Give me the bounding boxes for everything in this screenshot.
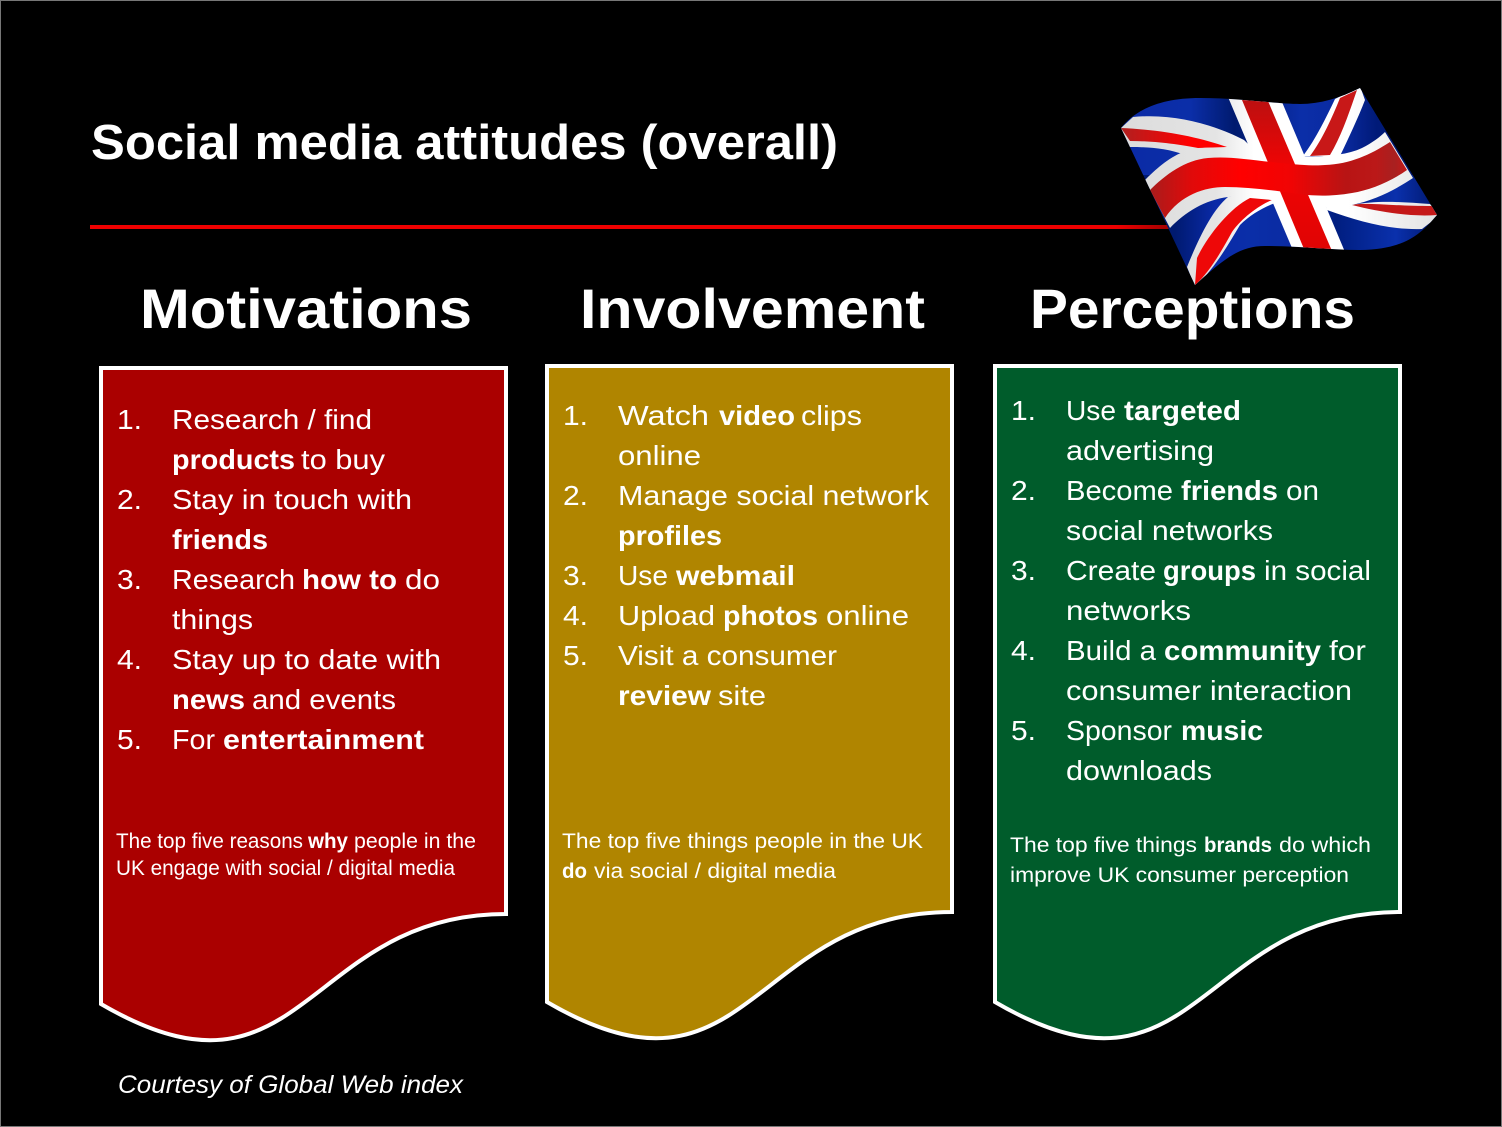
item 2: social networks	[1066, 515, 1273, 546]
item 4: photos	[723, 600, 818, 631]
list: perceptions	[1011, 395, 1371, 786]
caption: motivations: people in the	[354, 830, 476, 853]
item 3: in social	[1264, 555, 1371, 586]
item 5: entertainment	[223, 724, 424, 755]
item 5	[117, 724, 424, 755]
item 3: Research	[172, 564, 295, 595]
item 4	[563, 600, 909, 631]
item 5: downloads	[1066, 755, 1212, 786]
item 5: For	[172, 724, 215, 755]
item 3: 3.	[117, 564, 142, 595]
item 1	[563, 400, 862, 471]
list: involvement	[563, 400, 930, 711]
item 4: Build a	[1066, 635, 1156, 666]
item 2: 2.	[1011, 475, 1036, 506]
panel shape: gold	[547, 366, 952, 1038]
item 4: 4.	[563, 600, 588, 631]
item 2: on	[1286, 475, 1319, 506]
item 1	[1011, 395, 1241, 466]
panel shape: red	[101, 368, 506, 1040]
item 5: site	[718, 680, 766, 711]
item 4: community	[1164, 635, 1321, 666]
item 1: 1.	[563, 400, 588, 431]
caption: motivations: The top five reasons	[116, 830, 303, 853]
item 5	[1011, 715, 1263, 786]
item 5: 5.	[117, 724, 142, 755]
item 3: 3.	[1011, 555, 1036, 586]
item 3: webmail	[675, 560, 795, 591]
item 3: Use	[618, 560, 668, 591]
caption: perceptions: brands	[1204, 834, 1272, 857]
item 3: Create	[1066, 555, 1156, 586]
item 1: Watch	[618, 400, 709, 431]
item 1: products	[172, 444, 295, 475]
item 3	[1011, 555, 1371, 626]
item 2: Become	[1066, 475, 1173, 506]
item 4: Stay up to date with	[172, 644, 441, 675]
item 2	[117, 484, 412, 555]
caption: perceptions	[1010, 834, 1371, 887]
icon: waving UK flag	[1121, 88, 1437, 285]
item 4: news	[172, 684, 245, 715]
item 2: 2.	[117, 484, 142, 515]
item 4: consumer interaction	[1066, 675, 1352, 706]
item 4: Upload	[618, 600, 715, 631]
item 1: to buy	[301, 444, 385, 475]
item 1: online	[618, 440, 701, 471]
item 5: Sponsor	[1066, 715, 1172, 746]
item 4: online	[826, 600, 909, 631]
item 2: 2.	[563, 480, 588, 511]
item 3: things	[172, 604, 253, 635]
heading: Involvement: Involvement	[580, 277, 925, 340]
caption: motivations	[116, 830, 476, 880]
title rule	[90, 225, 1175, 229]
item 2: Manage social network	[618, 480, 930, 511]
caption: perceptions: The top five things	[1010, 834, 1197, 857]
item 4: 4.	[1011, 635, 1036, 666]
caption: perceptions: improve UK consumer perception	[1010, 864, 1349, 887]
panel: Perceptions	[995, 366, 1400, 1038]
item 1: advertising	[1066, 435, 1214, 466]
item 5	[563, 640, 837, 711]
list: motivations	[117, 404, 441, 755]
item 5: Visit a consumer	[618, 640, 837, 671]
heading: Motivations: Motivations	[140, 277, 472, 340]
item 3	[117, 564, 440, 635]
item 1: Research / find	[172, 404, 372, 435]
caption: involvement: The top five things people in the UK	[562, 830, 923, 853]
panel: Motivations	[101, 368, 506, 1040]
item 4	[1011, 635, 1366, 706]
item 3: networks	[1066, 595, 1191, 626]
item 5: 5.	[1011, 715, 1036, 746]
item 5: 5.	[563, 640, 588, 671]
caption: involvement	[562, 830, 923, 883]
item 4: 4.	[117, 644, 142, 675]
caption: motivations: why	[307, 830, 348, 853]
caption: involvement: do	[562, 860, 587, 883]
item 4	[117, 644, 441, 715]
item 2	[1011, 475, 1319, 546]
panel shape: green	[995, 366, 1400, 1038]
item 1: Use	[1066, 395, 1116, 426]
item 5: review	[618, 680, 711, 711]
item 5: music	[1181, 715, 1263, 746]
item 2: friends	[172, 524, 268, 555]
item 2: Stay in touch with	[172, 484, 412, 515]
item 3	[563, 560, 795, 591]
item 1	[117, 404, 385, 475]
item 2	[563, 480, 930, 551]
item 1: 1.	[117, 404, 142, 435]
item 3: do	[405, 564, 440, 595]
item 3: groups	[1163, 555, 1256, 586]
heading: Perceptions: Perceptions	[1030, 277, 1355, 340]
item 1: video	[719, 400, 795, 431]
item 2: friends	[1181, 475, 1278, 506]
source credit: Courtesy of Global Web index	[118, 1071, 465, 1099]
item 1: 1.	[1011, 395, 1036, 426]
caption: involvement: via social / digital media	[594, 860, 836, 883]
caption: perceptions: do which	[1279, 834, 1371, 857]
item 2: profiles	[618, 520, 722, 551]
item 3: 3.	[563, 560, 588, 591]
item 4: for	[1329, 635, 1366, 666]
title: Social media attitudes (overall)	[91, 116, 838, 170]
panel: Involvement	[547, 366, 952, 1038]
item 1: targeted	[1124, 395, 1241, 426]
item 3: how to	[302, 564, 397, 595]
caption: motivations: UK engage with social / digital media	[116, 857, 455, 880]
item 1: clips	[801, 400, 862, 431]
item 4: and events	[252, 684, 396, 715]
